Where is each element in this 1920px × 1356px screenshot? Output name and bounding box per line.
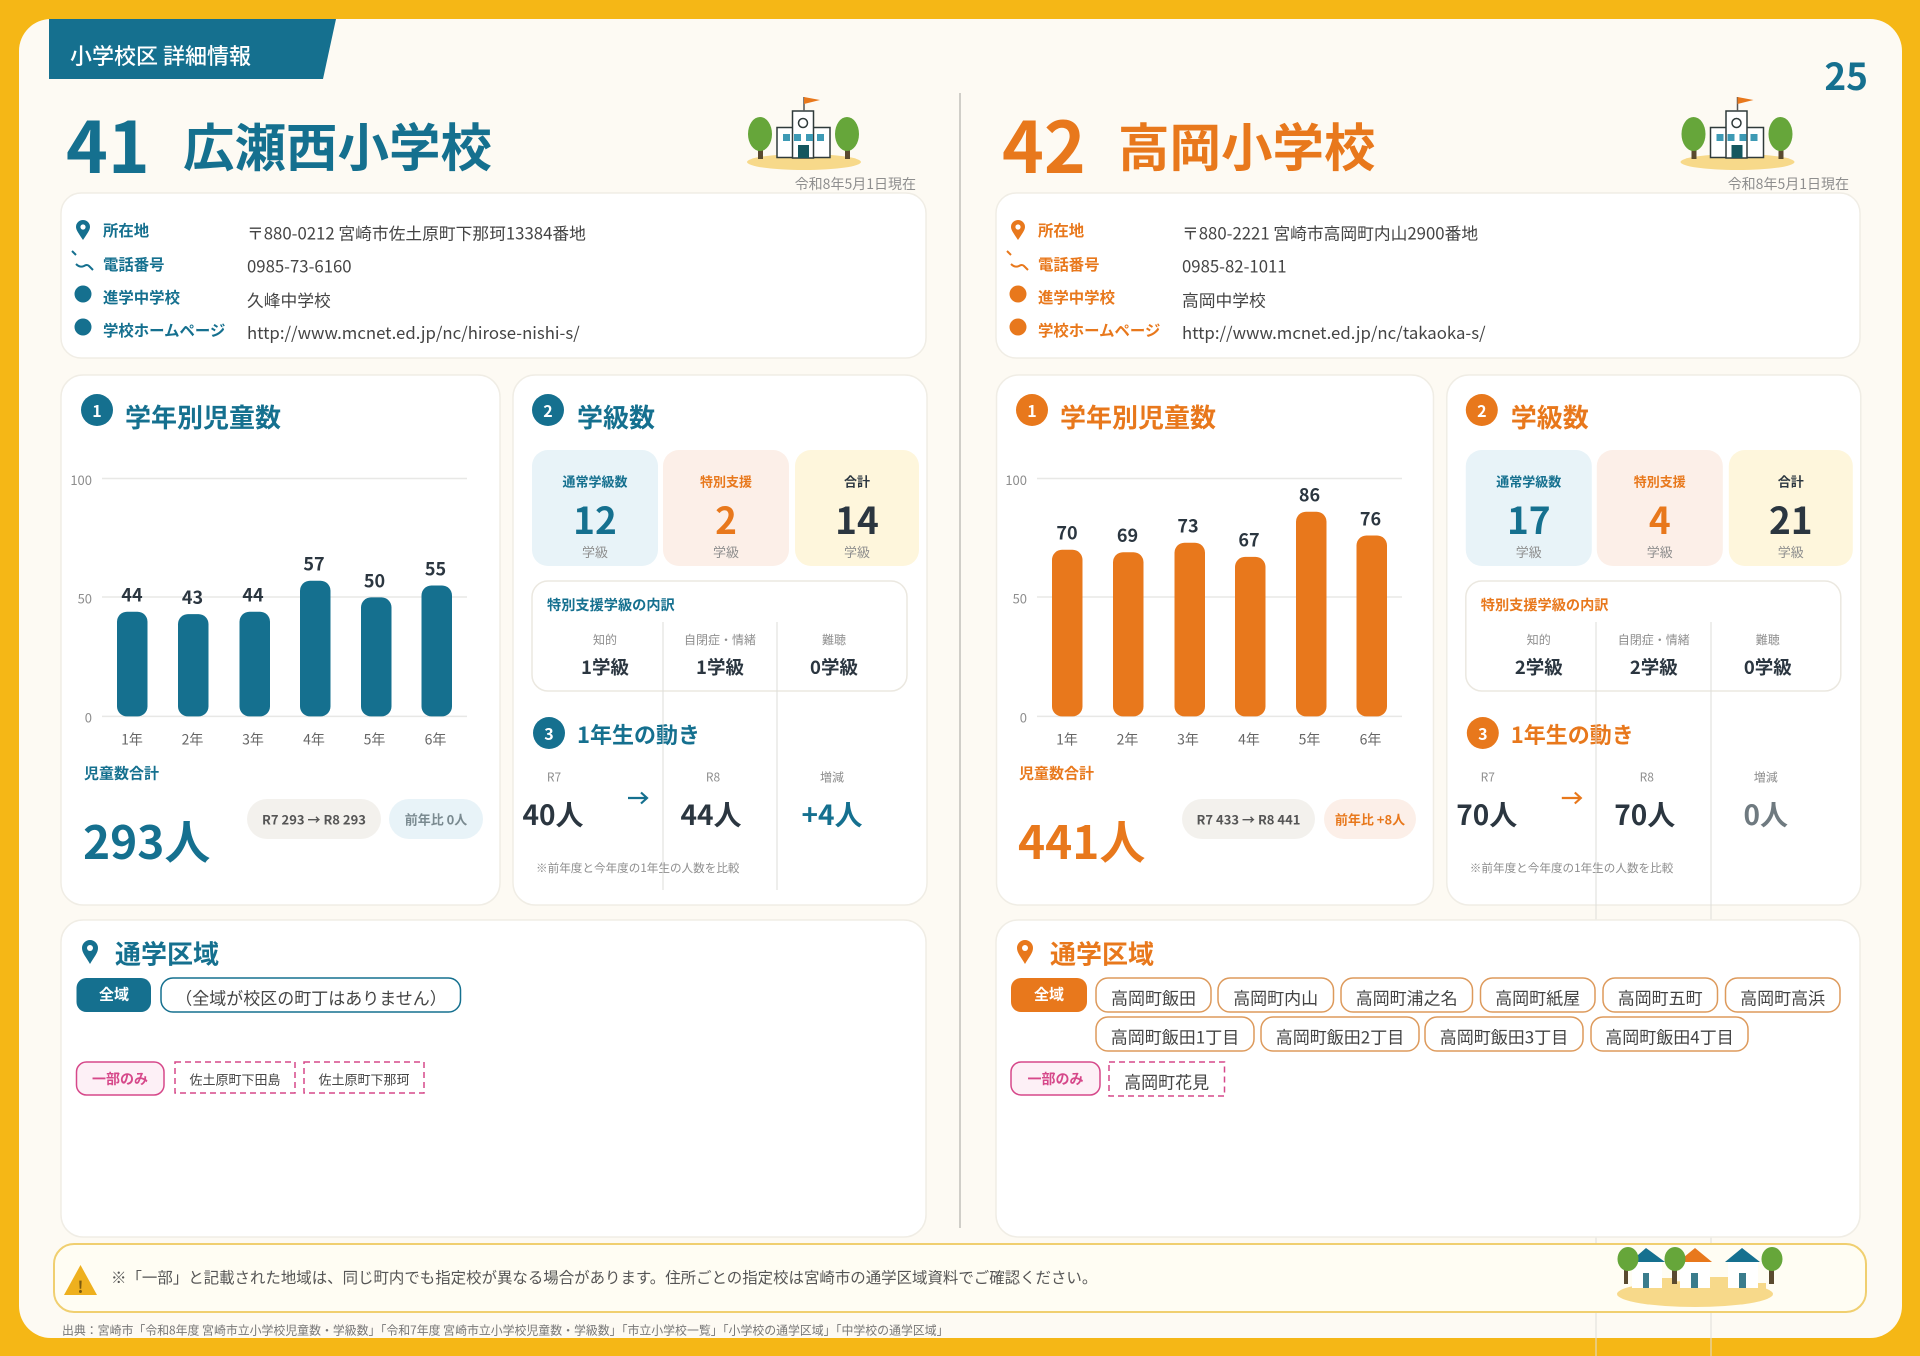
total label: 児童数合計 bbox=[84, 762, 159, 784]
bar chart: 1年 bbox=[121, 730, 143, 750]
chip: Takahama bbox=[1726, 978, 1840, 1012]
bar chart: 69 bbox=[1117, 522, 1138, 548]
chip: whole area: 全域 bbox=[99, 984, 129, 1004]
heading: students by grade: 学年別児童数 bbox=[125, 398, 281, 435]
heading: class counts: 学級数 bbox=[577, 398, 655, 435]
first-year comparison: 70人 bbox=[1614, 794, 1675, 834]
stat card: regular classes bbox=[1466, 450, 1592, 566]
notice text: ※「一部」と記載された地域は、同じ町内でも指定校が異なる場合があります。住所ごとの指定校は宮崎市の通学区域資料でご確認ください。 bbox=[111, 1266, 1097, 1288]
breakdown box: 0学級 bbox=[1744, 654, 1792, 680]
stat card: special support: 特別支援 bbox=[700, 472, 752, 490]
chip: Iida 1-chome: 高岡町飯田1丁目 bbox=[1111, 1024, 1239, 1048]
label: junior high: 進学中学校 bbox=[1038, 286, 1116, 308]
bar chart: 3年 bbox=[1177, 730, 1199, 750]
badge 1 bbox=[1016, 394, 1048, 426]
icon: phone bbox=[1007, 251, 1028, 270]
bar chart: 86 bbox=[1299, 482, 1320, 508]
school column 41 bbox=[61, 92, 927, 1237]
chip: partial only bbox=[1011, 1062, 1100, 1095]
badge 3: 3 bbox=[544, 721, 554, 745]
badge 3 bbox=[1467, 717, 1499, 749]
first-year comparison: R7 bbox=[547, 768, 561, 786]
bar chart: 50 bbox=[1013, 588, 1027, 608]
bar chart bbox=[70, 470, 467, 750]
note: ※前年度と今年度の1年生の人数を比較 bbox=[1470, 860, 1674, 876]
stat card: special support: 特別支援 bbox=[1634, 472, 1686, 490]
icon: location pin bbox=[76, 220, 90, 240]
panel: students by grade bbox=[996, 375, 1434, 905]
breakdown box: 特別支援学級の内訳 bbox=[547, 595, 675, 615]
bar chart: 5年 bbox=[364, 730, 385, 750]
chip: Uranomyo: 高岡町浦之名 bbox=[1356, 984, 1458, 1010]
bar chart: 3年 bbox=[242, 730, 264, 750]
icon: warning triangle: ! bbox=[78, 1274, 83, 1298]
first-year comparison: 0人 bbox=[1744, 794, 1788, 834]
badge 2 bbox=[532, 394, 564, 426]
source footer: 出典：宮崎市「令和8年度 宮崎市立小学校児童数・学級数」「令和7年度 宮崎市立小学校児童数・学級数」「市立小学校一覧」「小学校の通学区域」「中学校の通学区域」 bbox=[62, 1322, 949, 1338]
stat card: total: 合計 bbox=[844, 472, 870, 490]
badge 1: 1 bbox=[1027, 398, 1037, 422]
heading: students by grade: 学年別児童数 bbox=[1060, 398, 1216, 435]
heading: class counts: 学級数 bbox=[1511, 398, 1589, 435]
first-year comparison: R8 bbox=[1640, 768, 1654, 786]
pill: year comparison bbox=[247, 799, 381, 839]
badge 1: 1 bbox=[92, 398, 102, 422]
heading: school zone: 通学区域 bbox=[1050, 934, 1154, 972]
notice box bbox=[54, 1244, 1866, 1312]
bar chart: 76 bbox=[1360, 505, 1381, 531]
panel: students by grade bbox=[61, 375, 500, 905]
note: ※前年度と今年度の1年生の人数を比較 bbox=[536, 860, 740, 876]
address value: 〒880-2221 宮崎市高岡町内山2900番地 bbox=[1182, 220, 1478, 244]
chip: Uranomyo bbox=[1341, 978, 1472, 1012]
label: phone: 電話番号 bbox=[1038, 253, 1100, 275]
pill: year comparison: R7 433 → R8 441 bbox=[1197, 810, 1300, 828]
chip: Iida 3-chome: 高岡町飯田3丁目 bbox=[1440, 1024, 1568, 1048]
icon: warning triangle bbox=[64, 1265, 97, 1298]
date note: 令和8年5月1日現在 bbox=[1728, 174, 1849, 194]
icon: location pin bbox=[1011, 220, 1025, 240]
badge 2: 2 bbox=[1477, 398, 1487, 422]
bar chart: 6年 bbox=[425, 730, 446, 750]
stat card: regular classes: 17 bbox=[1507, 491, 1551, 545]
stat card: total: 学級 bbox=[1778, 542, 1804, 561]
first-year comparison bbox=[522, 768, 863, 834]
panel: school info bbox=[61, 193, 926, 358]
chip: Hanami: 高岡町花見 bbox=[1124, 1068, 1209, 1094]
column divider bbox=[959, 93, 961, 1228]
phone value: 0985-82-1011 bbox=[1182, 254, 1287, 278]
address value: 〒880-0212 宮崎市佐土原町下那珂13384番地 bbox=[247, 220, 586, 244]
stat card: total: 21 bbox=[1769, 491, 1813, 545]
breakdown box: 2学級 bbox=[1630, 654, 1678, 680]
bar chart: 55 bbox=[425, 556, 446, 582]
bar chart: 44 bbox=[121, 582, 143, 608]
chip: Iida 3-chome bbox=[1425, 1017, 1583, 1051]
stat card: special support: 学級 bbox=[713, 542, 739, 561]
stat card: special support bbox=[663, 450, 789, 566]
first-year comparison: 70人 bbox=[1456, 794, 1517, 834]
breakdown box: 自閉症・情緒 bbox=[684, 631, 756, 648]
badge 3: 3 bbox=[1478, 721, 1488, 745]
chip: Iida 4-chome: 高岡町飯田4丁目 bbox=[1605, 1024, 1734, 1048]
breakdown box: 特別支援学級の内訳 bbox=[1481, 595, 1609, 615]
label: address: 所在地 bbox=[1038, 219, 1085, 241]
label: junior high: 進学中学校 bbox=[103, 286, 181, 308]
chip: Uchiyama bbox=[1218, 978, 1334, 1012]
first-year comparison bbox=[1456, 768, 1788, 834]
stat card: special support: 学級 bbox=[1647, 542, 1673, 561]
badge 2: 2 bbox=[543, 398, 553, 422]
chip: Iida 4-chome bbox=[1591, 1017, 1748, 1051]
stat card: total: 合計 bbox=[1778, 472, 1804, 490]
stat card: special support bbox=[1597, 450, 1723, 566]
total value: 441人 bbox=[1018, 807, 1145, 873]
chip: partial only bbox=[76, 1062, 164, 1095]
pill: year comparison bbox=[1182, 799, 1315, 839]
header tab bbox=[49, 19, 336, 79]
chip: partial only: 一部のみ bbox=[1028, 1069, 1084, 1089]
label: homepage: 学校ホームページ bbox=[1038, 319, 1160, 341]
bar chart: 4年 bbox=[1238, 730, 1260, 750]
breakdown box: 0学級 bbox=[810, 654, 858, 680]
panel: class counts bbox=[1447, 375, 1861, 905]
first-year comparison: R8 bbox=[706, 768, 720, 786]
icon: junior high dot bbox=[74, 286, 92, 302]
stat card: total bbox=[1729, 450, 1853, 566]
chip: Gocho bbox=[1603, 978, 1718, 1012]
date note: 令和8年5月1日現在 bbox=[795, 174, 916, 194]
junior high value: 久峰中学校 bbox=[247, 288, 331, 312]
breakdown box: 難聴 bbox=[1756, 631, 1780, 648]
label: homepage: 学校ホームページ bbox=[103, 319, 225, 341]
breakdown box: 2学級 bbox=[1515, 654, 1563, 680]
page number: 25 bbox=[1824, 47, 1868, 101]
chip: whole area bbox=[76, 978, 151, 1012]
pill: year comparison: R7 293 → R8 293 bbox=[262, 810, 366, 828]
breakdown box: 難聴 bbox=[822, 631, 846, 648]
first-year comparison: 増減 bbox=[1754, 768, 1778, 786]
first-year comparison: R7 bbox=[1481, 768, 1495, 786]
bar chart: 5年 bbox=[1299, 730, 1320, 750]
school column 42 bbox=[996, 92, 1861, 1356]
panel: class counts bbox=[513, 375, 927, 905]
pill: change bbox=[1324, 799, 1416, 839]
chip: Kamiya: 高岡町紙屋 bbox=[1495, 984, 1580, 1010]
chip: Iida 1-chome bbox=[1096, 1017, 1254, 1051]
panel: school zone bbox=[61, 920, 926, 1237]
breakdown box: 知的 bbox=[593, 631, 617, 648]
chip: Hanami bbox=[1109, 1062, 1224, 1096]
chip: Shimonaka bbox=[304, 1062, 424, 1093]
breakdown box bbox=[532, 581, 907, 691]
stat card: regular classes: 学級 bbox=[1516, 542, 1542, 561]
pill: change bbox=[389, 799, 483, 839]
icon: houses bbox=[1617, 1247, 1782, 1307]
chip: whole area: 全域 bbox=[1034, 984, 1064, 1004]
chip: Takahama: 高岡町高浜 bbox=[1740, 984, 1825, 1010]
stat card: regular classes: 通常学級数 bbox=[1496, 472, 1561, 490]
pill: change: 前年比 +8人 bbox=[1335, 810, 1405, 828]
breakdown box: 知的 bbox=[1527, 631, 1551, 648]
breakdown box bbox=[1466, 581, 1841, 691]
homepage value: http://www.mcnet.ed.jp/nc/hirose-nishi-s/ bbox=[247, 320, 580, 344]
first-year comparison: 増減 bbox=[820, 768, 844, 786]
phone value: 0985-73-6160 bbox=[247, 254, 352, 278]
chip: Iida 2-chome: 高岡町飯田2丁目 bbox=[1276, 1024, 1404, 1048]
bar chart: 0 bbox=[85, 708, 92, 726]
icon: school building bbox=[747, 97, 861, 170]
label: address: 所在地 bbox=[103, 219, 150, 241]
stat card: regular classes: 12 bbox=[573, 491, 617, 545]
bar chart bbox=[1005, 470, 1402, 750]
bar chart: 67 bbox=[1238, 527, 1260, 553]
bar chart: 43 bbox=[182, 584, 203, 610]
breakdown box: 1学級 bbox=[581, 654, 629, 680]
bar chart: 50 bbox=[78, 588, 92, 608]
bar chart: 4年 bbox=[303, 730, 325, 750]
school name: 広瀬西小学校 bbox=[183, 106, 492, 182]
school number: 42 bbox=[1002, 92, 1086, 194]
junior high value: 高岡中学校 bbox=[1182, 288, 1266, 312]
icon: phone bbox=[72, 251, 93, 270]
breakdown box: 自閉症・情緒 bbox=[1618, 631, 1690, 648]
header tab: 小学校区 詳細情報 bbox=[70, 39, 251, 71]
heading: school zone: 通学区域 bbox=[115, 934, 219, 972]
stat card: total: 14 bbox=[835, 491, 879, 545]
bar chart: 2年 bbox=[182, 730, 203, 750]
pill: change: 前年比 0人 bbox=[405, 810, 467, 828]
panel: school info bbox=[996, 193, 1860, 358]
bar chart: 70 bbox=[1056, 520, 1078, 546]
bar chart: 0 bbox=[1020, 708, 1027, 726]
bar chart: 1年 bbox=[1056, 730, 1078, 750]
chip: Gocho: 高岡町五町 bbox=[1618, 984, 1703, 1010]
bar chart: 100 bbox=[70, 470, 92, 489]
bar chart: 44 bbox=[242, 582, 264, 608]
icon: zone pin bbox=[82, 940, 98, 964]
bar chart: 73 bbox=[1177, 512, 1199, 538]
stat card: special support: 4 bbox=[1649, 491, 1671, 545]
bar chart: 2年 bbox=[1117, 730, 1138, 750]
chip: Shimotajima bbox=[175, 1062, 295, 1093]
icon: school building bbox=[1680, 97, 1794, 170]
chip: none bbox=[161, 978, 460, 1012]
badge 3 bbox=[533, 717, 565, 749]
icon: zone pin bbox=[1017, 940, 1033, 964]
breakdown box: 1学級 bbox=[696, 654, 744, 680]
stat card: regular classes bbox=[532, 450, 658, 566]
homepage value: http://www.mcnet.ed.jp/nc/takaoka-s/ bbox=[1182, 320, 1486, 344]
icon: homepage dot bbox=[1010, 318, 1026, 336]
stat card: total: 学級 bbox=[844, 542, 870, 561]
bar chart: 6年 bbox=[1360, 730, 1381, 750]
icon: homepage dot bbox=[74, 318, 92, 336]
label: phone: 電話番号 bbox=[103, 253, 165, 275]
stat card: regular classes: 通常学級数 bbox=[562, 472, 628, 490]
first-year comparison: 40人 bbox=[522, 794, 584, 834]
total label: 児童数合計 bbox=[1019, 762, 1094, 784]
first-year comparison: +4人 bbox=[801, 794, 863, 834]
chip: Uchiyama: 高岡町内山 bbox=[1233, 984, 1318, 1010]
chip: Kamiya bbox=[1480, 978, 1595, 1012]
badge 1 bbox=[81, 394, 113, 426]
icon: junior high dot bbox=[1010, 286, 1026, 302]
chip: none: （全域が校区の町丁はありません） bbox=[175, 984, 447, 1010]
stat card: regular classes: 学級 bbox=[582, 542, 608, 561]
school number: 41 bbox=[66, 92, 150, 194]
chip: Iida bbox=[1096, 978, 1211, 1012]
heading: first-year movement: 1年生の動き bbox=[577, 718, 700, 750]
heading: first-year movement: 1年生の動き bbox=[1511, 718, 1634, 750]
chip: Iida 2-chome bbox=[1261, 1017, 1419, 1051]
stat card: total bbox=[795, 450, 919, 566]
bar chart: 50 bbox=[364, 567, 385, 593]
panel: school zone bbox=[996, 920, 1860, 1237]
chip: partial only: 一部のみ bbox=[92, 1069, 148, 1089]
chip: Shimonaka: 佐土原町下那珂 bbox=[318, 1070, 410, 1088]
badge 2 bbox=[1466, 394, 1498, 426]
stat card: special support: 2 bbox=[715, 491, 737, 545]
bar chart: 57 bbox=[303, 551, 325, 577]
total value: 293人 bbox=[83, 807, 210, 873]
school name: 高岡小学校 bbox=[1118, 106, 1376, 182]
chip: Iida: 高岡町飯田 bbox=[1111, 984, 1196, 1010]
chip: whole area bbox=[1011, 978, 1087, 1012]
first-year comparison: 44人 bbox=[680, 794, 742, 834]
chip: Shimotajima: 佐土原町下田島 bbox=[189, 1070, 281, 1088]
bar chart: 100 bbox=[1005, 470, 1027, 489]
